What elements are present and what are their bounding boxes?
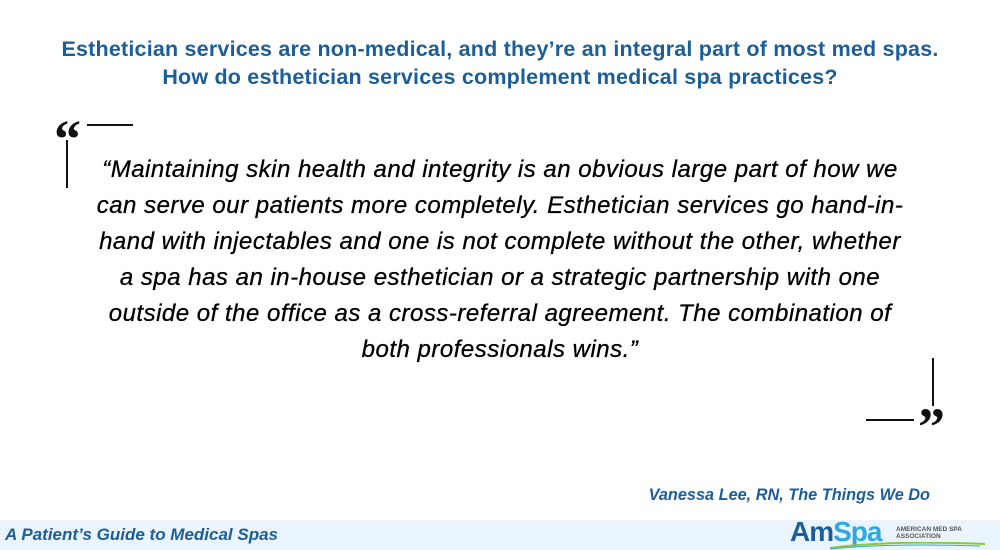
logo: AmSpa: AMERICAN MED SPA xyxy=(896,526,962,533)
quote text: can serve our patients more completely. Esthetician services go hand-in- xyxy=(97,192,903,219)
quote text: outside of the office as a cross-referral agreement. The combination of xyxy=(109,300,891,327)
icon: opening quote mark: “ xyxy=(54,109,81,169)
attribution: Vanessa Lee, RN, The Things We Do xyxy=(649,486,930,504)
quote text: both professionals wins.” xyxy=(362,336,638,363)
icon: closing quote mark: ” xyxy=(918,397,945,457)
logo: AmSpa: AmSpa xyxy=(790,516,881,547)
logo: AmSpa xyxy=(790,516,986,550)
footer band xyxy=(0,520,1000,550)
quote text: hand with injectables and one is not complete without the other, whether xyxy=(99,228,901,255)
quote text xyxy=(97,156,903,363)
footer text: A Patient’s Guide to Medical Spas xyxy=(5,525,278,544)
title xyxy=(61,37,939,89)
quote text: a spa has an in-house esthetician or a strategic partnership with one xyxy=(120,264,880,291)
title: Esthetician services are non-medical, and they’re an integral part of most med spas. xyxy=(61,37,939,61)
logo: AmSpa: ASSOCIATION xyxy=(896,533,941,540)
quote text: “Maintaining skin health and integrity is an obvious large part of how we xyxy=(102,156,898,183)
title: How do esthetician services complement medical spa practices? xyxy=(162,65,838,89)
